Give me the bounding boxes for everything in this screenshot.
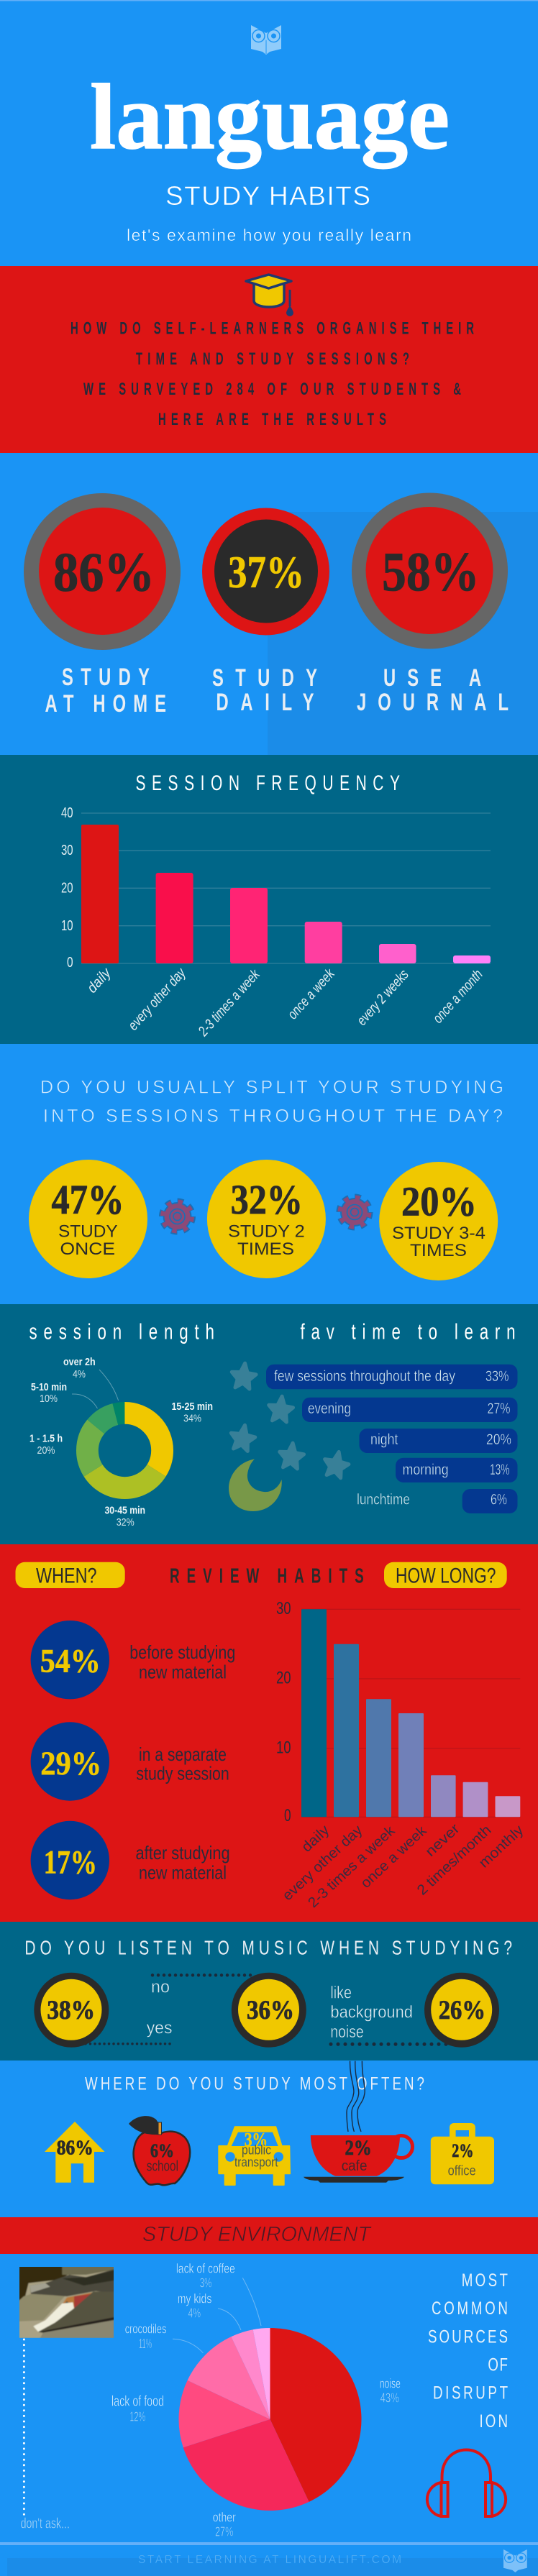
heading: study environment: STUDY ENVIRONMENT (142, 2223, 372, 2246)
stat: study once: ONCE (60, 1239, 115, 1259)
heading: fav time to learn: fav time to learn (301, 1319, 516, 1344)
donut chart: session length: 5-10 min (31, 1381, 67, 1393)
heading: most common sources of disruption: DISRUPT (433, 2383, 508, 2403)
pie chart: disruptions: 43% (380, 2391, 399, 2406)
heading: most common sources of disruption: OF (488, 2355, 508, 2375)
icon: steaming cup: 2% (345, 2136, 372, 2160)
survey question text: HOW DO SELF-LEARNERS ORGANISE THEIR (70, 319, 474, 339)
icon: steaming cup: cafe (342, 2158, 367, 2174)
pie chart: disruptions: 11% (139, 2337, 152, 2351)
stat: study 3-4 times (379, 1162, 498, 1280)
heading: music question: DO YOU LISTEN TO MUSIC WHEN STUDYING? (24, 1938, 512, 1959)
donut chart: session length (29, 1356, 213, 1528)
icon: crescent moon (229, 1459, 282, 1511)
bar list: favourite time to learn: 27% (488, 1401, 511, 1417)
stat: use a journal: 58% (382, 541, 479, 602)
music labels: yes (147, 2018, 173, 2038)
stat: study 2 times (207, 1160, 326, 1278)
pill: when: WHEN? (36, 1564, 96, 1588)
donut chart: session length: 1 - 1.5 h (29, 1433, 63, 1445)
icon: owl book logo (251, 25, 281, 55)
bar chart: session frequency: every other day (125, 965, 189, 1034)
heading: where: WHERE DO YOU STUDY MOST OFTEN? (85, 2073, 424, 2094)
stat: before studying (31, 1621, 235, 1699)
stat: study 3-4 times: STUDY 3-4 (392, 1224, 485, 1243)
bar chart: session frequency: 40 (61, 805, 73, 821)
stat: after studying: 17% (44, 1844, 97, 1881)
heading: most common sources of disruption: MOST (462, 2270, 508, 2291)
panel: survey intro (0, 266, 538, 453)
panel: key percentages (0, 453, 538, 755)
stat: study at home: STUDY (62, 664, 150, 691)
bar list: favourite time to learn: night (370, 1431, 398, 1448)
stat: study once: STUDY (58, 1222, 118, 1242)
stat: no music: 38% (47, 1996, 95, 2025)
icon: briefcase: 2% (452, 2140, 473, 2161)
panel: footer (0, 2542, 538, 2576)
pie chart: disruptions: 12% (129, 2409, 145, 2424)
bar list: favourite time to learn (266, 1365, 518, 1513)
footer link text: START LEARNING AT LINGUALIFT.COM (138, 2554, 401, 2566)
stat: separate session: 29% (40, 1745, 101, 1782)
bar chart: session frequency: 30 (61, 843, 73, 858)
icon: headphones (427, 2450, 506, 2516)
bar chart: session frequency: 20 (61, 880, 73, 896)
icon: briefcase: office (448, 2164, 476, 2179)
donut chart: session length: 10% (40, 1393, 58, 1405)
image: crocodile (19, 2267, 114, 2338)
bar chart: review duration: never (422, 1820, 463, 1860)
heading: most common sources of disruption: SOURCES (428, 2327, 508, 2347)
panel: where do you study (0, 2061, 538, 2217)
survey question text: WE SURVEYED 284 OF OUR STUDENTS & (83, 380, 461, 399)
bar chart: review duration: every other day (280, 1823, 365, 1904)
bar list: favourite time to learn: 20% (486, 1431, 511, 1448)
heading: most common sources of disruption: COMMON (432, 2298, 508, 2319)
bar chart: review duration: 20 (276, 1669, 291, 1688)
bar list: favourite time to learn: lunchtime (357, 1492, 410, 1508)
bar chart: session frequency: 10 (61, 918, 73, 934)
icon: car (219, 2127, 290, 2185)
music labels (147, 1978, 413, 2042)
title: language: language (90, 65, 450, 169)
pie chart: disruptions: 3% (200, 2276, 211, 2291)
stat: yes music: 36% (247, 1996, 294, 2025)
stat: separate session: study session (136, 1763, 229, 1784)
stat: study 3-4 times: TIMES (410, 1241, 467, 1260)
subtitle: study habits: STUDY HABITS (165, 181, 370, 211)
stat: after studying: new material (139, 1861, 227, 1883)
stat: before studying: new material (139, 1661, 227, 1682)
donut chart: session length: 4% (73, 1368, 86, 1380)
stat: study at home (24, 493, 181, 718)
icon: stars (229, 1362, 351, 1479)
bar chart: review duration: monthly (476, 1823, 526, 1871)
bar chart: review duration (276, 1599, 526, 1911)
music labels: background (330, 2003, 413, 2022)
bar list: favourite time to learn: 13% (490, 1462, 509, 1478)
pill: how long: HOW LONG? (396, 1564, 496, 1588)
donut chart: session length: over 2h (63, 1356, 96, 1368)
icon: gear left (163, 1201, 193, 1232)
bar chart: review duration: once a week (358, 1823, 430, 1892)
stat: study at home: AT HOME (45, 690, 166, 718)
donut chart: session length: 15-25 min (171, 1401, 213, 1413)
pie chart: disruptions: noise (380, 2376, 401, 2391)
donut chart: session length: 34% (183, 1413, 201, 1425)
stat: yes music (232, 1973, 306, 2048)
bar chart: review duration: 10 (276, 1738, 291, 1757)
panel: review habits (0, 1544, 538, 1922)
stat: before studying: 54% (40, 1643, 101, 1680)
bar list: favourite time to learn: 33% (485, 1368, 509, 1385)
icon: car: 3% (245, 2129, 268, 2150)
stat: after studying: after studying (135, 1842, 230, 1864)
stat: use a journal: USE A (383, 664, 481, 692)
heading: session frequency: SESSION FREQUENCY (135, 772, 400, 795)
icon: footer owl logo (503, 2549, 527, 2572)
icon: car: public (242, 2143, 271, 2158)
question: split sessions: INTO SESSIONS THROUGHOUT THE DAY? (43, 1106, 503, 1127)
pie chart: disruptions (111, 2262, 401, 2539)
bar chart: session frequency (61, 805, 491, 1040)
icon: steaming cup (304, 2061, 413, 2183)
donut chart: session length: 32% (117, 1516, 134, 1528)
bar chart: review duration: 2 times/month (414, 1823, 494, 1899)
panel: disruptions (0, 2254, 538, 2576)
panel: session length and favourite time (0, 1304, 538, 1544)
heading: review habits: REVIEW HABITS (170, 1565, 364, 1588)
pie chart: disruptions: other (213, 2511, 236, 2525)
stat: background noise: 26% (439, 1996, 485, 2025)
stat: separate session (31, 1722, 229, 1801)
stat: study 2 times: TIMES (237, 1239, 294, 1259)
stat: study 2 times: STUDY 2 (228, 1222, 305, 1242)
stat: separate session: in a separate (139, 1743, 227, 1765)
stat: study daily (202, 508, 329, 716)
stat: use a journal (352, 493, 509, 716)
stat: study at home: 86% (53, 541, 155, 602)
pie chart: disruptions: lack of food (111, 2394, 164, 2410)
panel: session frequency (0, 755, 538, 1044)
bar chart: session frequency: 2-3 times a week (195, 966, 263, 1040)
stat: before studying: before studying (129, 1641, 235, 1663)
panel: music (0, 1922, 538, 2061)
bar chart: session frequency: once a month (430, 967, 486, 1027)
question: split sessions (40, 1078, 503, 1127)
tagline: let's examine how you really learn (127, 226, 411, 244)
panel: header (0, 0, 538, 266)
stat: study 2 times: 32% (231, 1176, 303, 1223)
caption: don't ask: don't ask... (21, 2516, 70, 2532)
panel: study environment banner (0, 2217, 538, 2254)
stat: no music (34, 1973, 109, 2048)
question: split sessions: DO YOU USUALLY SPLIT YOUR STUDYING (40, 1078, 503, 1098)
bar chart: review duration: 2-3 times a week (305, 1823, 398, 1911)
stat: study daily: DAILY (216, 689, 314, 716)
pill: when (16, 1562, 125, 1588)
pie chart: disruptions: my kids (178, 2291, 211, 2306)
bar list: favourite time to learn: few sessions throughout the day (274, 1368, 455, 1385)
bar chart: session frequency: every 2 weeks (354, 967, 412, 1029)
music labels: no (151, 1978, 170, 1997)
pie chart: disruptions: 4% (188, 2306, 201, 2320)
heading: most common sources of disruption (428, 2270, 508, 2431)
pie chart: disruptions: 27% (215, 2524, 233, 2539)
bar list: favourite time to learn: morning (403, 1462, 449, 1478)
bar chart: session frequency: 0 (67, 955, 73, 971)
donut chart: session length: 30-45 min (105, 1505, 145, 1517)
panel: split sessions (0, 1044, 538, 1304)
music labels: like (330, 1983, 352, 2002)
stat: background noise (424, 1973, 499, 2048)
stat: study daily: STUDY (212, 664, 317, 692)
bar chart: review duration: daily (298, 1823, 332, 1856)
pie chart: disruptions: lack of coffee (176, 2262, 235, 2276)
music labels: noise (330, 2022, 364, 2042)
stat: after studying (31, 1821, 230, 1899)
bar chart: session frequency: once a week (285, 966, 338, 1022)
survey question text: TIME AND STUDY SESSIONS? (136, 350, 409, 369)
bar chart: session frequency: daily (84, 965, 114, 996)
icon: apple: 6% (150, 2140, 174, 2161)
icon: graduation cap (246, 275, 293, 316)
dotted line to caption (23, 2339, 25, 2515)
stat: study 3-4 times: 20% (401, 1178, 477, 1225)
icon: briefcase (431, 2123, 494, 2184)
bar list: favourite time to learn: 6% (491, 1492, 507, 1508)
icon: apple: school (147, 2158, 178, 2174)
heading: most common sources of disruption: ION (479, 2411, 508, 2431)
icon: apple (129, 2116, 190, 2185)
icon: car: transport (234, 2155, 278, 2169)
heading: session length: session length (29, 1319, 214, 1344)
bar list: favourite time to learn: evening (308, 1401, 351, 1417)
survey question text: HERE ARE THE RESULTS (158, 411, 386, 429)
stat: study once: 47% (52, 1176, 124, 1223)
survey question text (70, 319, 474, 429)
dotted connectors (86, 1975, 450, 2044)
bar chart: review duration: 0 (284, 1806, 291, 1825)
bar chart: review duration: 30 (276, 1599, 291, 1618)
icon: house (45, 2122, 105, 2183)
pie chart: disruptions: crocodiles (125, 2322, 166, 2337)
icon: gear right (339, 1197, 370, 1227)
icon: house: 86% (57, 2137, 94, 2160)
stat: study daily: 37% (228, 546, 304, 597)
donut chart: session length: 20% (37, 1444, 55, 1457)
stat: use a journal: JOURNAL (357, 689, 509, 716)
stat: study once (29, 1160, 147, 1278)
